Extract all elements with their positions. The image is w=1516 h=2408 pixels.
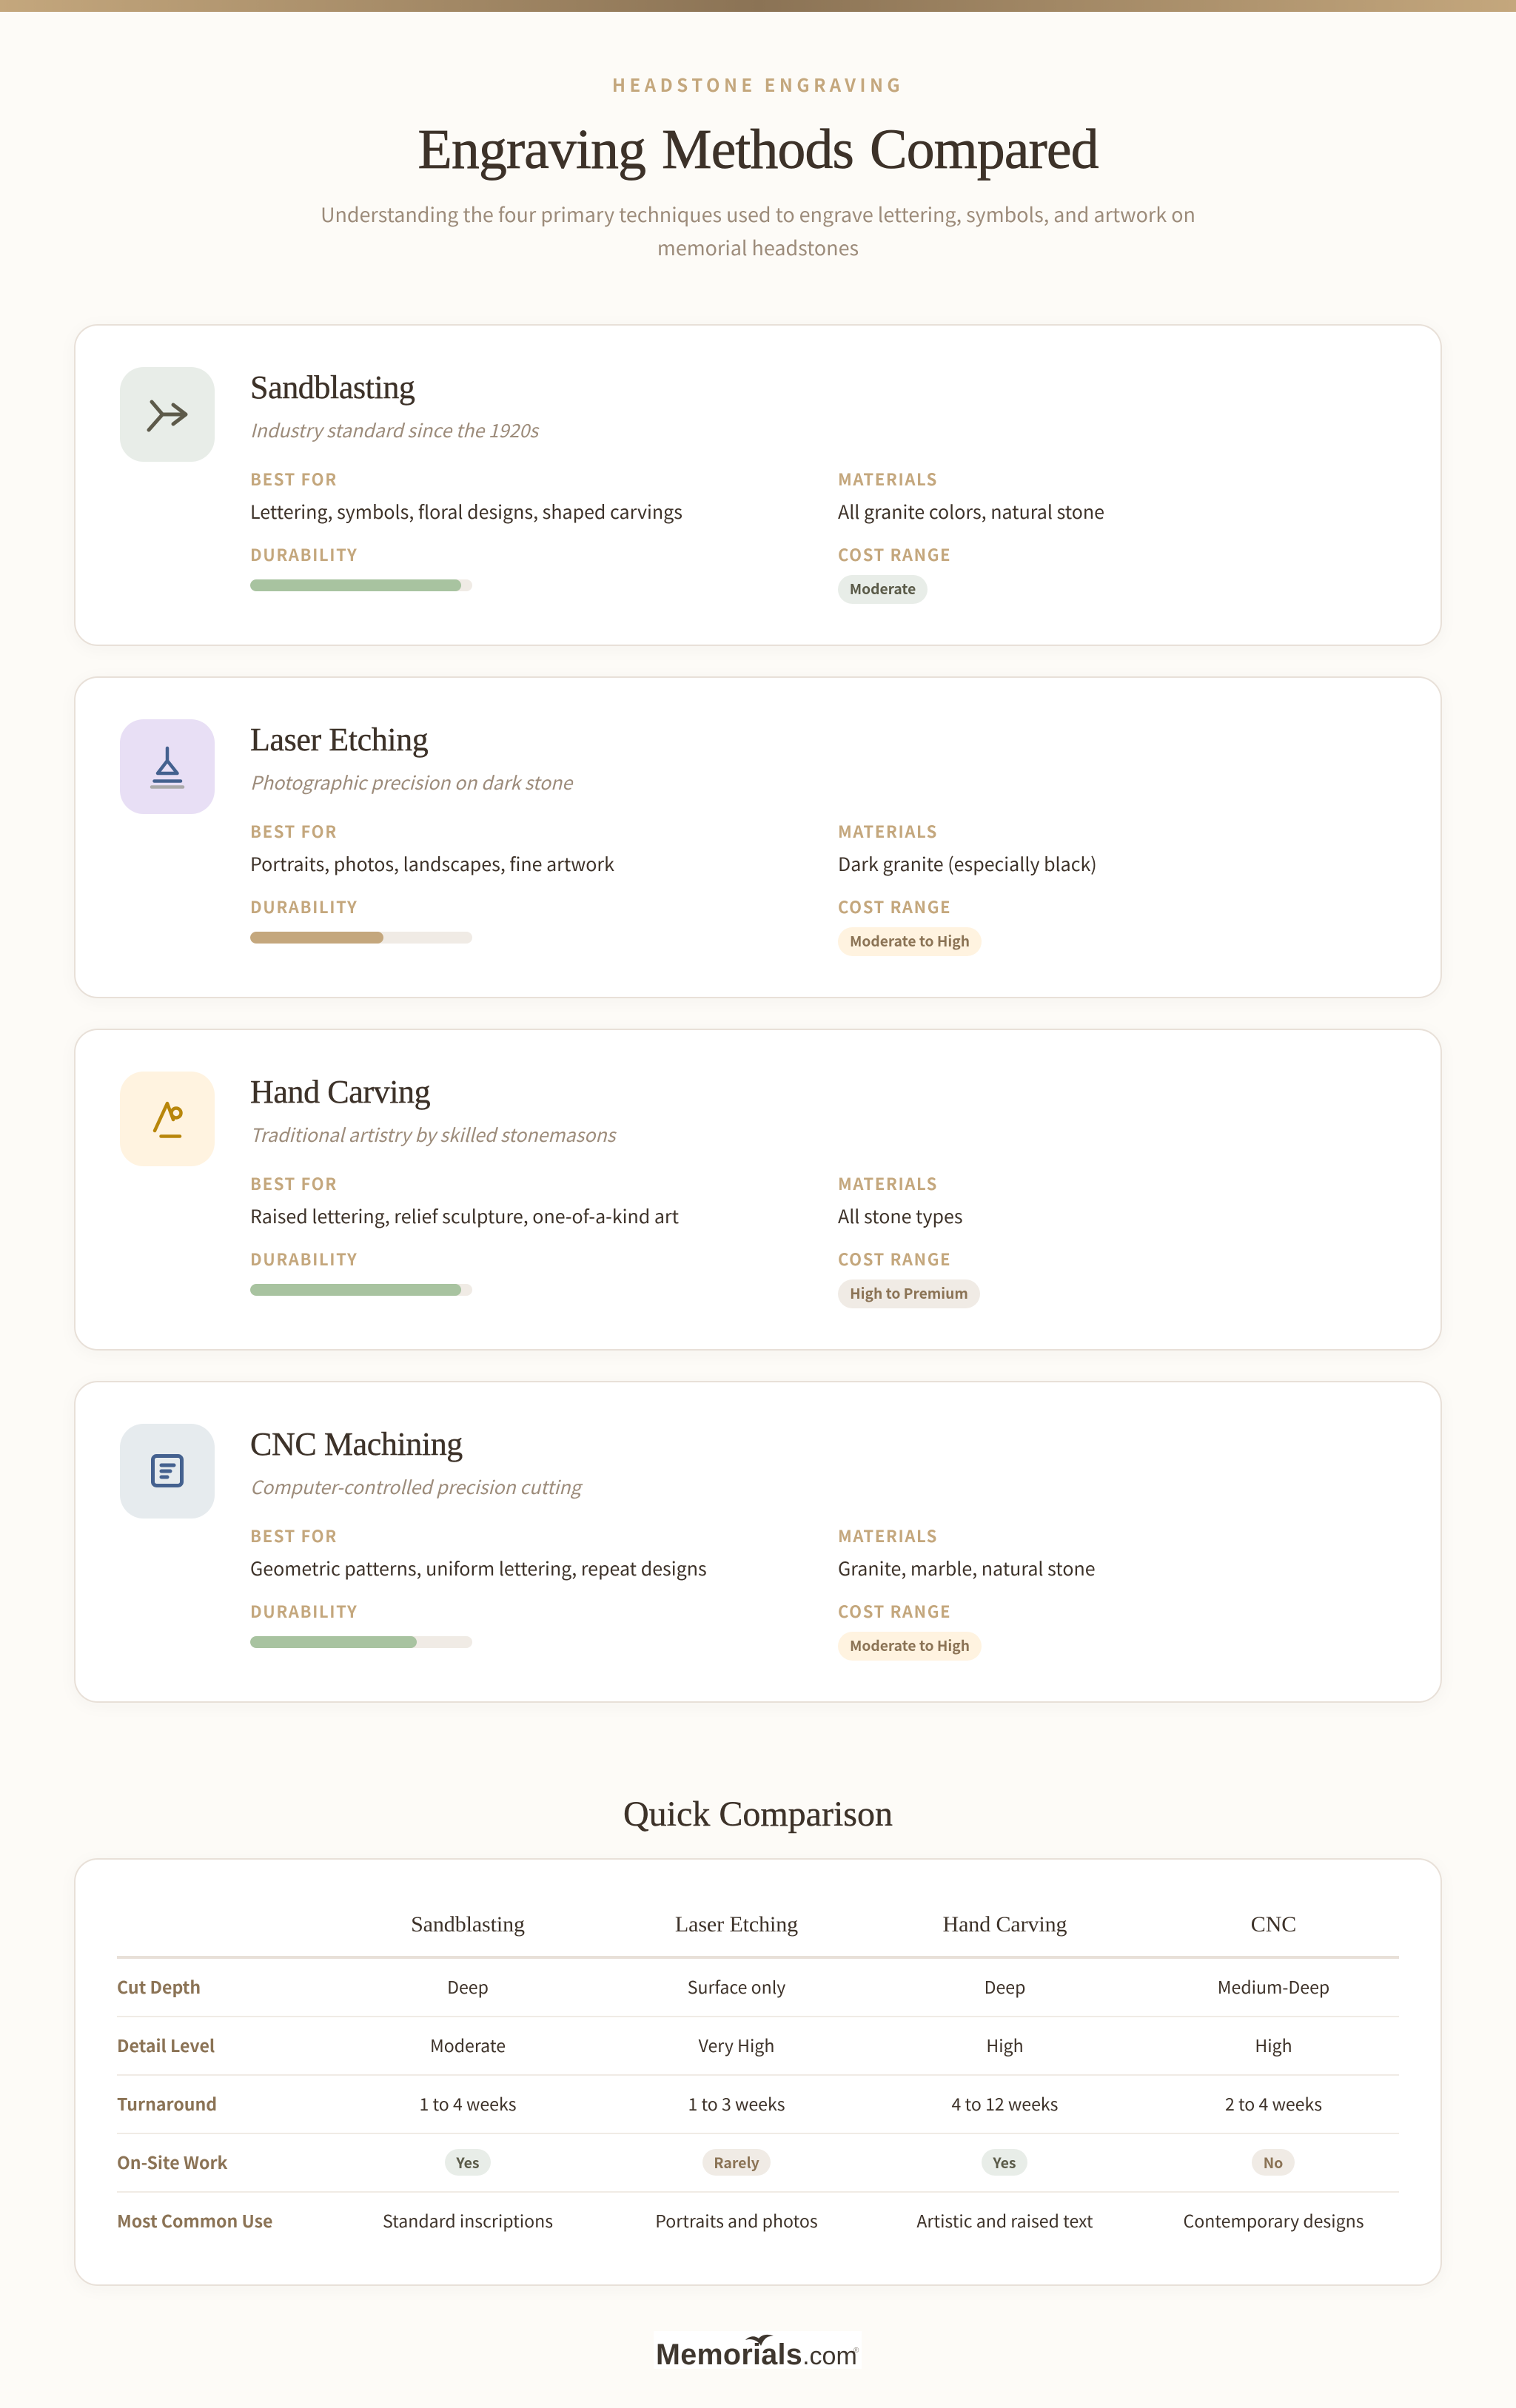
method name: Laser Etching — [250, 722, 428, 758]
panel: comparison table — [74, 1858, 1442, 2286]
durability bar — [250, 579, 472, 591]
cost label: COST RANGE — [838, 895, 951, 918]
materials label: MATERIALS — [838, 1524, 938, 1547]
cost pill — [838, 1279, 980, 1308]
row: Most Common Use: Contemporary designs — [1183, 2207, 1364, 2233]
method name: Hand Carving — [250, 1074, 430, 1110]
icon: hand carving — [120, 1072, 215, 1166]
tagline: Traditional artistry by skilled stonemasons — [250, 1121, 615, 1148]
row: Detail Level: High — [986, 2032, 1024, 2057]
method name: Sandblasting — [250, 369, 415, 406]
cost pill — [838, 1632, 982, 1661]
durability label: DURABILITY — [250, 1599, 358, 1623]
best for label: BEST FOR — [250, 467, 338, 491]
top gradient bar — [0, 0, 1516, 12]
cost pill: Moderate — [850, 578, 916, 599]
materials value: All stone types — [838, 1203, 963, 1229]
icon: CNC — [120, 1424, 215, 1519]
tagline: Photographic precision on dark stone — [250, 769, 572, 796]
best for value: Geometric patterns, uniform lettering, repeat designs — [250, 1555, 707, 1581]
row: Turnaround: 1 to 4 weeks — [419, 2091, 517, 2116]
subtitle: memorial headstones — [657, 232, 859, 260]
materials value: Granite, marble, natural stone — [838, 1555, 1096, 1581]
eyebrow label: HEADSTONE ENGRAVING — [612, 71, 904, 97]
row: Cut Depth: Medium-Deep — [1218, 1974, 1329, 1999]
best for label: BEST FOR — [250, 819, 338, 843]
best for value: Portraits, photos, landscapes, fine artwork — [250, 850, 614, 877]
durability label: DURABILITY — [250, 895, 358, 918]
logo: Memorials.com — [654, 2331, 862, 2369]
materials label: MATERIALS — [838, 1171, 938, 1195]
row: Turnaround: Turnaround — [117, 2091, 217, 2116]
tagline: Industry standard since the 1920s — [250, 417, 538, 443]
logo wordmark: Memorials.com — [656, 2338, 857, 2371]
best for value: Lettering, symbols, floral designs, shaped carvings — [250, 498, 682, 525]
materials value: All granite colors, natural stone — [838, 498, 1104, 525]
tagline: Computer-controlled precision cutting — [250, 1473, 581, 1500]
row: Most Common Use — [117, 2207, 1364, 2233]
row: Cut Depth: Cut Depth — [117, 1974, 201, 1999]
best for label: BEST FOR — [250, 1171, 338, 1195]
row: Turnaround: 1 to 3 weeks — [688, 2091, 785, 2116]
table header: CNC: CNC — [1251, 1912, 1296, 1937]
materials value: Dark granite (especially black) — [838, 850, 1097, 877]
cost pill: Moderate to High — [850, 930, 970, 951]
best for value: Raised lettering, relief sculpture, one-of-a-kind art — [250, 1203, 679, 1229]
row: Cut Depth — [117, 1959, 1399, 2017]
row: Detail Level: Detail Level — [117, 2032, 215, 2057]
row: Turnaround: 2 to 4 weeks — [1225, 2091, 1322, 2116]
cost pill — [838, 575, 928, 604]
row: Turnaround: 4 to 12 weeks — [952, 2091, 1058, 2116]
header rule — [117, 1956, 1399, 1959]
durability bar — [250, 1284, 472, 1296]
best for label: BEST FOR — [250, 1524, 338, 1547]
cost pill: High to Premium — [850, 1282, 968, 1303]
row: On-Site Work: Yes — [456, 2151, 480, 2173]
cost label: COST RANGE — [838, 1599, 951, 1623]
section heading: Quick Comparison: Quick Comparison — [623, 1795, 893, 1834]
row: Cut Depth: Deep — [985, 1974, 1025, 1999]
row: Turnaround — [117, 2076, 1399, 2134]
row: Most Common Use: Most Common Use — [117, 2207, 272, 2233]
row: On-Site Work: On-Site Work — [117, 2149, 227, 2174]
icon: sandblasting — [120, 367, 215, 462]
durability label: DURABILITY — [250, 1247, 358, 1271]
cost pill — [838, 927, 982, 956]
row: Cut Depth: Deep — [447, 1974, 489, 1999]
row: Most Common Use: Portraits and photos — [655, 2207, 818, 2233]
panel: Hand Carving — [74, 1029, 1442, 1351]
table header: Hand Carving: Hand Carving — [943, 1912, 1067, 1937]
row: Most Common Use: Artistic and raised text — [916, 2207, 1093, 2233]
cost label: COST RANGE — [838, 542, 951, 566]
row: On-Site Work: Rarely — [714, 2151, 759, 2173]
row: Detail Level — [117, 2017, 1399, 2076]
panel: CNC Machining — [74, 1381, 1442, 1703]
panel: Laser Etching — [74, 676, 1442, 998]
row: Detail Level: Very High — [699, 2032, 774, 2057]
row: Detail Level: High — [1255, 2032, 1292, 2057]
row: On-Site Work: No — [1264, 2151, 1283, 2173]
table header: Laser Etching: Laser Etching — [675, 1912, 798, 1937]
materials label: MATERIALS — [838, 819, 938, 843]
subtitle: Understanding the four primary techniques used to engrave lettering, symbols, and artwork on — [321, 198, 1195, 228]
icon: laser — [120, 719, 215, 814]
row: Detail Level: Moderate — [430, 2032, 506, 2057]
title: Engraving Methods Compared — [417, 118, 1099, 181]
logo bird — [745, 2334, 774, 2346]
materials label: MATERIALS — [838, 467, 938, 491]
method name: CNC Machining — [250, 1426, 463, 1462]
subtitle — [321, 198, 1195, 260]
cost label: COST RANGE — [838, 1247, 951, 1271]
row: Cut Depth: Surface only — [688, 1974, 785, 1999]
logo registered mark: ® — [853, 2347, 859, 2355]
row: Most Common Use: Standard inscriptions — [383, 2207, 553, 2233]
durability bar — [250, 1636, 472, 1648]
table header: Sandblasting: Sandblasting — [411, 1912, 525, 1937]
cost pill: Moderate to High — [850, 1635, 970, 1655]
row: On-Site Work — [117, 2134, 1399, 2193]
durability label: DURABILITY — [250, 542, 358, 566]
row: On-Site Work: Yes — [993, 2151, 1016, 2173]
panel: Sandblasting — [74, 324, 1442, 646]
durability bar — [250, 932, 472, 944]
